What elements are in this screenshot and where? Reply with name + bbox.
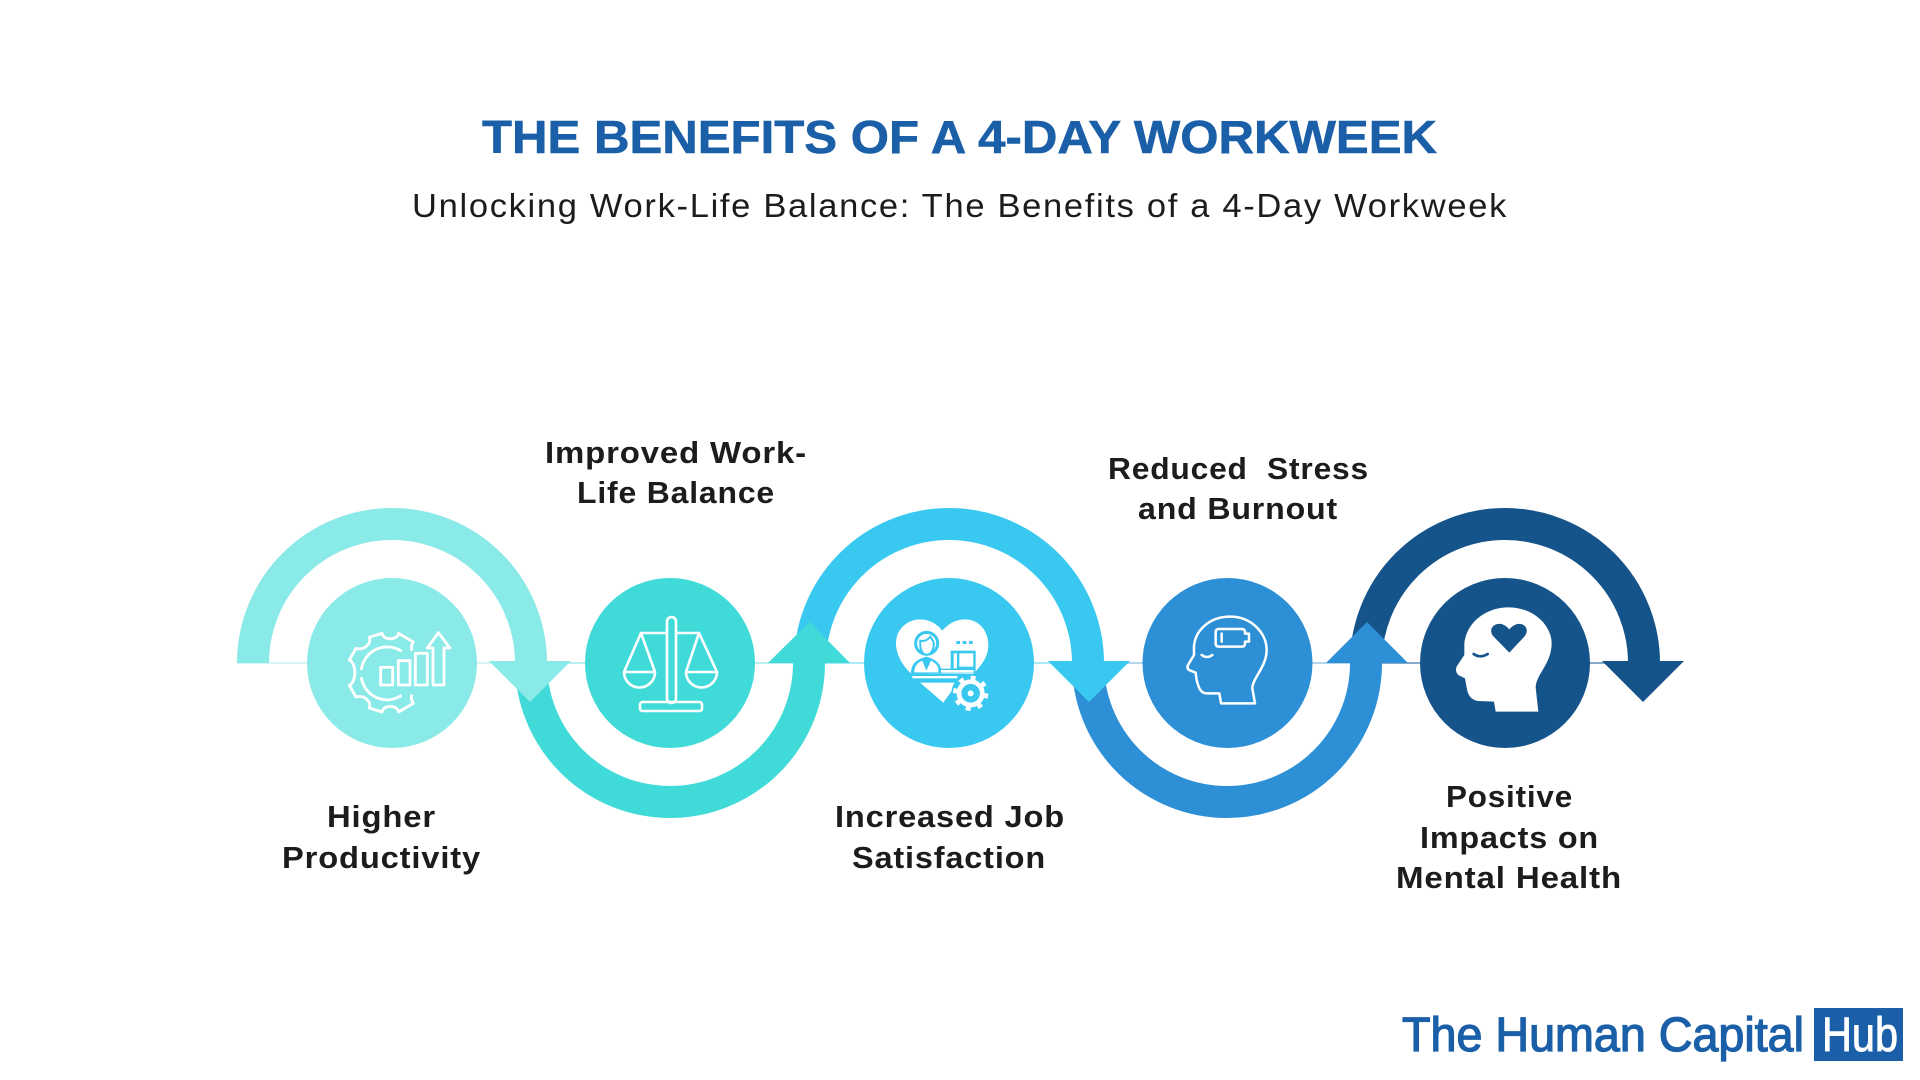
label: improved work-life balance: Improved Work-: [545, 435, 807, 470]
circle 2: [585, 578, 755, 748]
label: positive impacts on mental health: Mental Health: [1396, 860, 1622, 895]
arc 4: [1088, 663, 1366, 802]
subtitle: Unlocking Work-Life Balance: The Benefits of a 4-Day Workweek: [412, 187, 1508, 224]
label: reduced stress and burnout: Reduced Stress: [1108, 451, 1369, 486]
icon: head with heart: [1456, 607, 1552, 712]
arc 1: [253, 524, 531, 663]
circle 5: [1420, 578, 1590, 748]
step 5: positive impacts on mental health: [1366, 524, 1684, 748]
label: positive impacts on mental health: Impacts on: [1420, 820, 1599, 855]
label: increased job satisfaction: Increased Job: [835, 799, 1065, 834]
title: THE BENEFITS OF A 4-DAY WORKWEEK: [482, 111, 1437, 163]
label: higher productivity: [282, 799, 481, 875]
arc 3: [810, 524, 1088, 663]
step 4: reduced stress and burnout: [1088, 578, 1408, 802]
label: increased job satisfaction: Satisfaction: [852, 840, 1046, 875]
label: higher productivity: Productivity: [282, 840, 481, 875]
label: improved work-life balance: [545, 435, 807, 510]
label: reduced stress and burnout: [1108, 451, 1369, 526]
arrow 4: [1326, 622, 1408, 663]
arrow 2: [768, 622, 850, 663]
label: reduced stress and burnout: and Burnout: [1138, 491, 1338, 526]
arc 5: [1366, 524, 1644, 663]
label: improved work-life balance: Life Balance: [577, 475, 775, 510]
icon: balance scales: [624, 617, 717, 711]
label: increased job satisfaction: [835, 799, 1065, 875]
circle 1: [307, 578, 477, 748]
circle 4: [1142, 578, 1312, 748]
arrow 5: [1602, 661, 1684, 702]
label: positive impacts on mental health: Positive: [1446, 779, 1573, 814]
icon: head with low battery: [1187, 617, 1267, 703]
logo: the human capital hub: Hub: [1822, 1009, 1898, 1062]
arrow 3: [1048, 661, 1130, 702]
label: positive impacts on mental health: [1396, 779, 1622, 895]
step 2: improved work-life balance: [531, 578, 850, 802]
logo: the human capital hub: The Human Capital: [1402, 1009, 1804, 1062]
circle 3: [864, 578, 1034, 748]
arc 2: [531, 663, 809, 802]
step 1: higher productivity: [253, 524, 571, 748]
arrow 1: [489, 661, 571, 702]
step 3: increased job satisfaction: [810, 524, 1130, 748]
icon: heart with worker and gear: [896, 619, 990, 713]
label: higher productivity: Higher: [327, 799, 436, 834]
icon: gear with rising bars: [349, 633, 450, 712]
